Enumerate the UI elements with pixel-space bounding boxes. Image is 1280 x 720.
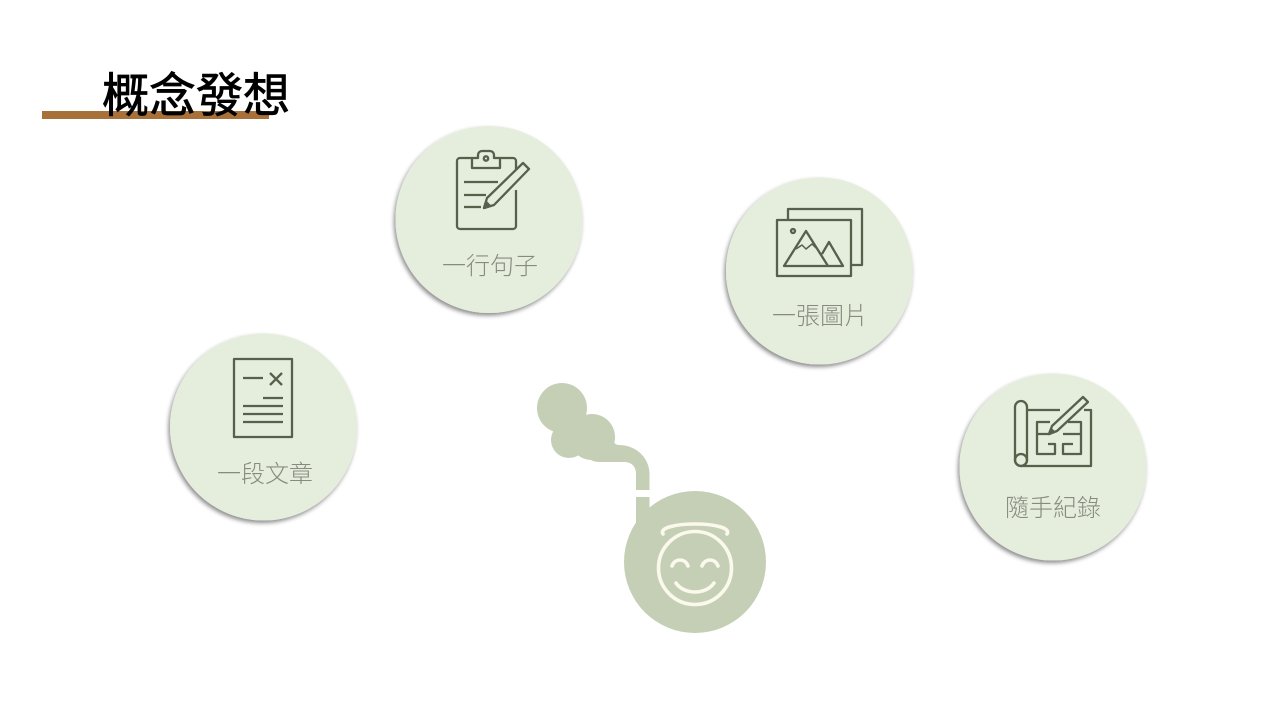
smoke pipe xyxy=(537,383,650,537)
circle background xyxy=(170,334,357,520)
label: 一行句子 xyxy=(442,253,538,280)
circle background xyxy=(396,126,582,313)
title underline bar xyxy=(42,111,269,119)
icon: angel smiley xyxy=(658,524,732,604)
panel: one picture xyxy=(726,178,913,364)
icon: blueprint and pencil xyxy=(1015,397,1091,466)
icon: clipboard and pencil xyxy=(457,151,529,229)
central smiley circle xyxy=(624,491,766,633)
icon: pictures xyxy=(777,209,862,276)
label: 隨手紀錄 xyxy=(1005,495,1101,522)
label: 一段文章 xyxy=(217,461,313,488)
circle background xyxy=(624,491,766,633)
circle background xyxy=(960,374,1146,560)
panel: one paragraph xyxy=(170,334,357,520)
title text: 概念發想 xyxy=(102,69,290,122)
panel: one sentence xyxy=(396,126,582,313)
panel: freehand notes xyxy=(960,374,1146,560)
icon: document xyxy=(234,359,292,437)
title xyxy=(42,69,290,122)
circle background xyxy=(726,178,913,364)
label: 一張圖片 xyxy=(772,303,868,330)
